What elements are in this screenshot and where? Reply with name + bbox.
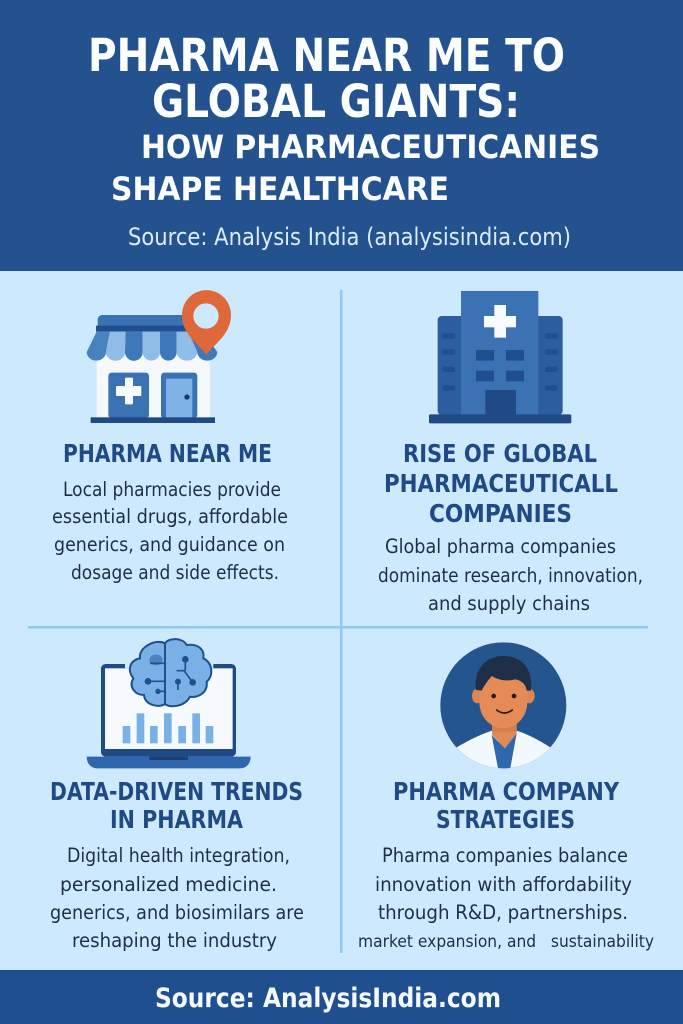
icon: hospital building (429, 291, 571, 423)
footer source text: Source: AnalysisIndia.com (155, 983, 501, 1014)
body text: strategies: innovation with affordability (375, 873, 632, 896)
icon: pharmacy storefront with map pin (87, 290, 231, 423)
body text: strategies: market expansion, and sustainability (358, 932, 654, 952)
title: PHARMA NEAR ME TO (88, 29, 565, 82)
heading: pharma company strategies: PHARMA COMPANY (393, 777, 619, 806)
body text: local pharmacies: essential drugs, affordable (52, 505, 288, 528)
heading: pharma company strategies (393, 777, 619, 834)
panel: data-driven trends (50, 639, 304, 952)
heading: pharma company strategies: STRATEGIES (436, 805, 575, 834)
header banner (0, 0, 683, 271)
body text: global pharma: dominate research, innovation, (378, 564, 643, 587)
panel: pharma near me (52, 290, 288, 584)
body text: global pharma: Global pharma companies (385, 535, 616, 558)
icon: laptop with brain and bar chart (87, 639, 251, 768)
body text: strategies: Pharma companies balance (382, 844, 628, 867)
body text: digital health: personalized medicine. (60, 873, 277, 896)
heading: rise of global pharmaceutical companies: PHARMACEUTICALL (384, 469, 618, 498)
body text: local pharmacies: generics, and guidance on (54, 533, 285, 556)
footer bar (0, 970, 683, 1024)
subtitle: SHAPE HEALTHCARE (111, 170, 449, 208)
source line: Source: Analysis India (analysisindia.com) (128, 223, 571, 251)
body text: local pharmacies (52, 478, 288, 584)
subtitle: HOW PHARMACEUTICANIES (141, 128, 600, 166)
body text: local pharmacies: dosage and side effects. (71, 561, 279, 584)
subtitle (111, 128, 600, 208)
heading: rise of global pharmaceutical companies (384, 439, 618, 528)
panel: pharma company strategies (358, 642, 654, 952)
body text: digital health: reshaping the industry (72, 929, 277, 952)
heading: rise of global pharmaceutical companies: RISE OF GLOBAL (403, 439, 597, 468)
heading: data-driven trends in pharma: DATA-DRIVEN TRENDS (50, 777, 303, 806)
icon: doctor avatar (440, 642, 566, 773)
body text: strategies: through R&D, partnerships. (378, 901, 628, 924)
body text: digital health (50, 844, 304, 952)
heading: data-driven trends in pharma: IN PHARMA (110, 805, 243, 834)
heading: pharma near me: PHARMA NEAR ME (63, 439, 272, 468)
heading: rise of global pharmaceutical companies: COMPANIES (429, 499, 572, 528)
body text: digital health: Digital health integration, (67, 844, 290, 867)
body text: strategies (358, 844, 654, 952)
body text: digital health: generics, and biosimilars are (50, 901, 304, 924)
body text: global pharma: and supply chains (428, 592, 590, 615)
body text: local pharmacies: Local pharmacies provide (63, 478, 281, 501)
title: GLOBAL GIANTS: (152, 75, 520, 128)
body text: global pharma (378, 535, 643, 615)
panel: rise of global pharma (378, 291, 643, 615)
title (88, 29, 565, 128)
heading: data-driven trends in pharma (50, 777, 303, 834)
